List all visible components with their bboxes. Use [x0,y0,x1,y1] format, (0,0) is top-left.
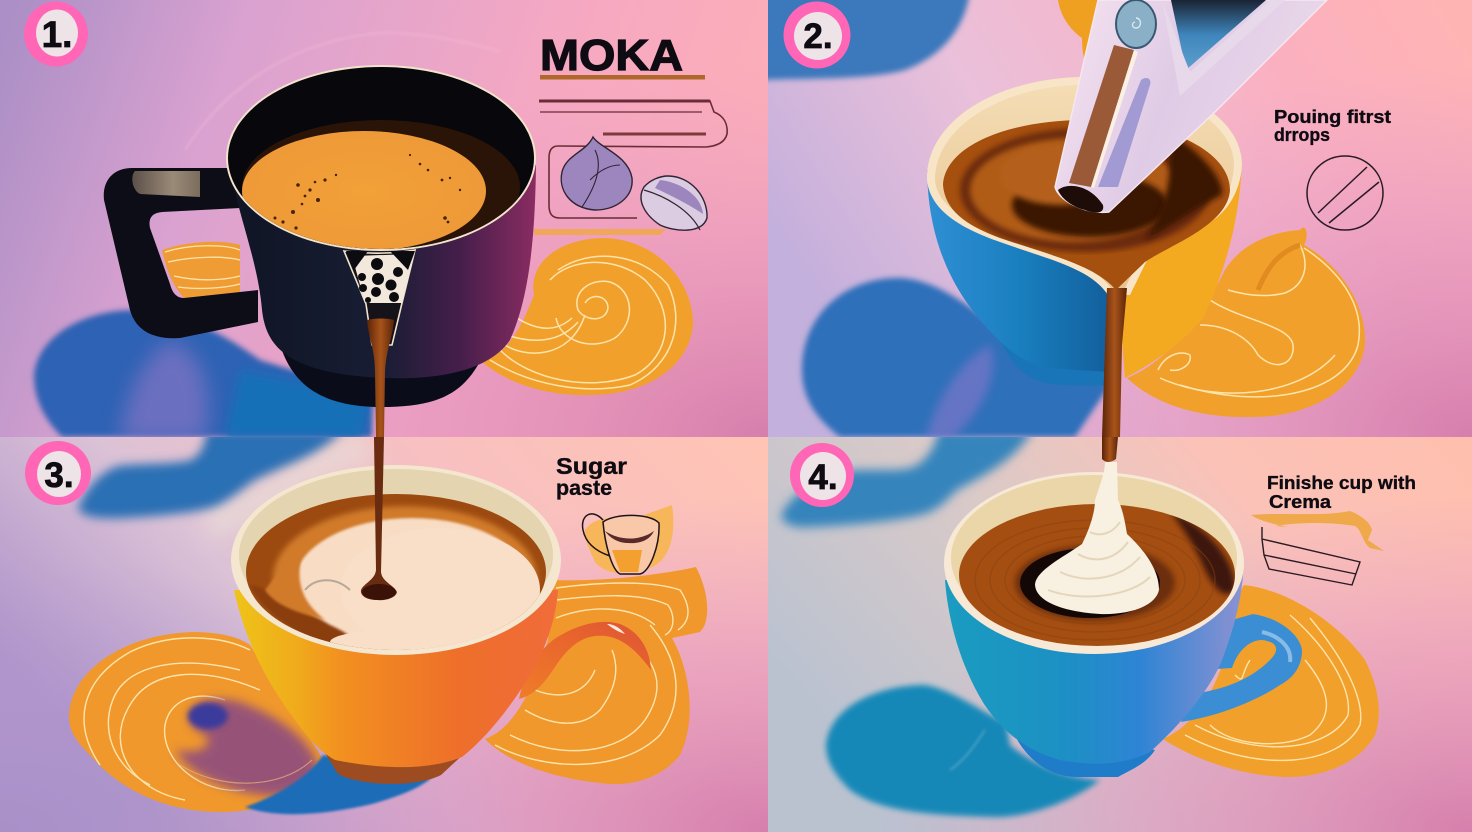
orange swirl coaster [1127,228,1365,417]
icon: crema bowl [1262,527,1360,585]
brown stripe [1069,45,1134,187]
coffee stream [367,318,394,437]
panel: step 2 pouring [760,0,1472,440]
drop stream [361,437,397,600]
icon: moka bean purple [561,137,632,210]
cup shadow [826,685,1100,817]
coffee surface [955,500,1240,650]
faint swirl line [305,580,350,590]
cup body yellow [1118,160,1242,378]
cup foot [1010,725,1155,777]
faint arc [185,33,500,150]
moka pot spout [1055,0,1327,213]
icon: slashed circle [1307,156,1383,230]
top shadow [760,0,970,80]
blue window [1171,0,1266,70]
crema surface [242,131,486,251]
inner wall [239,469,553,641]
step badge 2: 2. [803,17,833,56]
panel: step 3 sugar paste [0,430,768,832]
top shadow [78,430,343,518]
pot body [1055,0,1327,212]
cup foot [1002,343,1104,386]
orange swirl coaster [1163,585,1379,777]
step badge 4: 4. [808,458,838,497]
step badge 1: 1. [42,14,72,55]
crema speckles [274,154,461,230]
orange swirl coaster [482,238,693,395]
cup base [323,750,468,784]
mug interior [228,67,534,249]
mug rim [226,65,536,251]
line diagram [539,101,727,218]
cup shadow [802,278,1110,440]
step badge 4 [790,443,854,507]
step badge 3 [25,441,91,505]
icon: small cup [583,505,673,574]
cup handle [519,622,651,699]
orange strip [534,229,666,235]
knob [1116,0,1156,48]
caption text: Sugar [556,453,627,479]
orange swirl right [485,567,707,784]
cup handle [1181,614,1302,722]
spout with dots [344,250,415,345]
panel: step 1 moka mug [0,0,768,440]
coffee stream [1102,437,1118,462]
panel: step 3 sugar paste: paste [556,477,612,500]
inner wall [951,475,1237,641]
step badge 2 [784,2,850,68]
handle window coaster [162,242,240,298]
handle highlight [1262,632,1290,662]
caption text: Pouing fitrst [1274,107,1391,127]
title text: MOKA [540,31,683,80]
mug shadow [34,310,372,440]
dark coffee ring [242,120,520,254]
cup body [234,590,558,767]
crema splash [1251,511,1384,551]
panel: step 4 finish with crema [768,430,1472,832]
cup interior wall [927,77,1242,295]
whipped cream [1035,462,1159,614]
latte surface [240,490,555,656]
dark tip [1058,186,1103,213]
coffee stream [1102,288,1127,437]
panel: step 4 finish with crema: Crema [1269,492,1332,512]
step badge 1 [24,2,88,66]
cup rim [231,465,561,655]
step badge 3: 3. [44,456,74,495]
orange swirl left [69,632,330,812]
blue shadow [245,755,431,814]
cup rim [944,472,1244,654]
top shadow [781,430,1033,527]
pale glow beside shadow [205,445,370,525]
title underline [540,75,705,80]
cup body blue [927,170,1110,372]
coffee surface [943,120,1230,288]
purple cup shadow [176,699,317,796]
cup body [945,575,1243,764]
caption text: Finishe cup with [1267,472,1416,493]
mug handle [104,168,258,338]
icon: moka bean light [641,176,707,230]
mug foot [282,352,478,407]
panel: step 2 pouring: drrops [1274,125,1330,145]
lavender slit [1098,78,1150,187]
orange pot base [1058,0,1098,58]
mug body [230,165,536,378]
handle highlight [132,171,200,197]
